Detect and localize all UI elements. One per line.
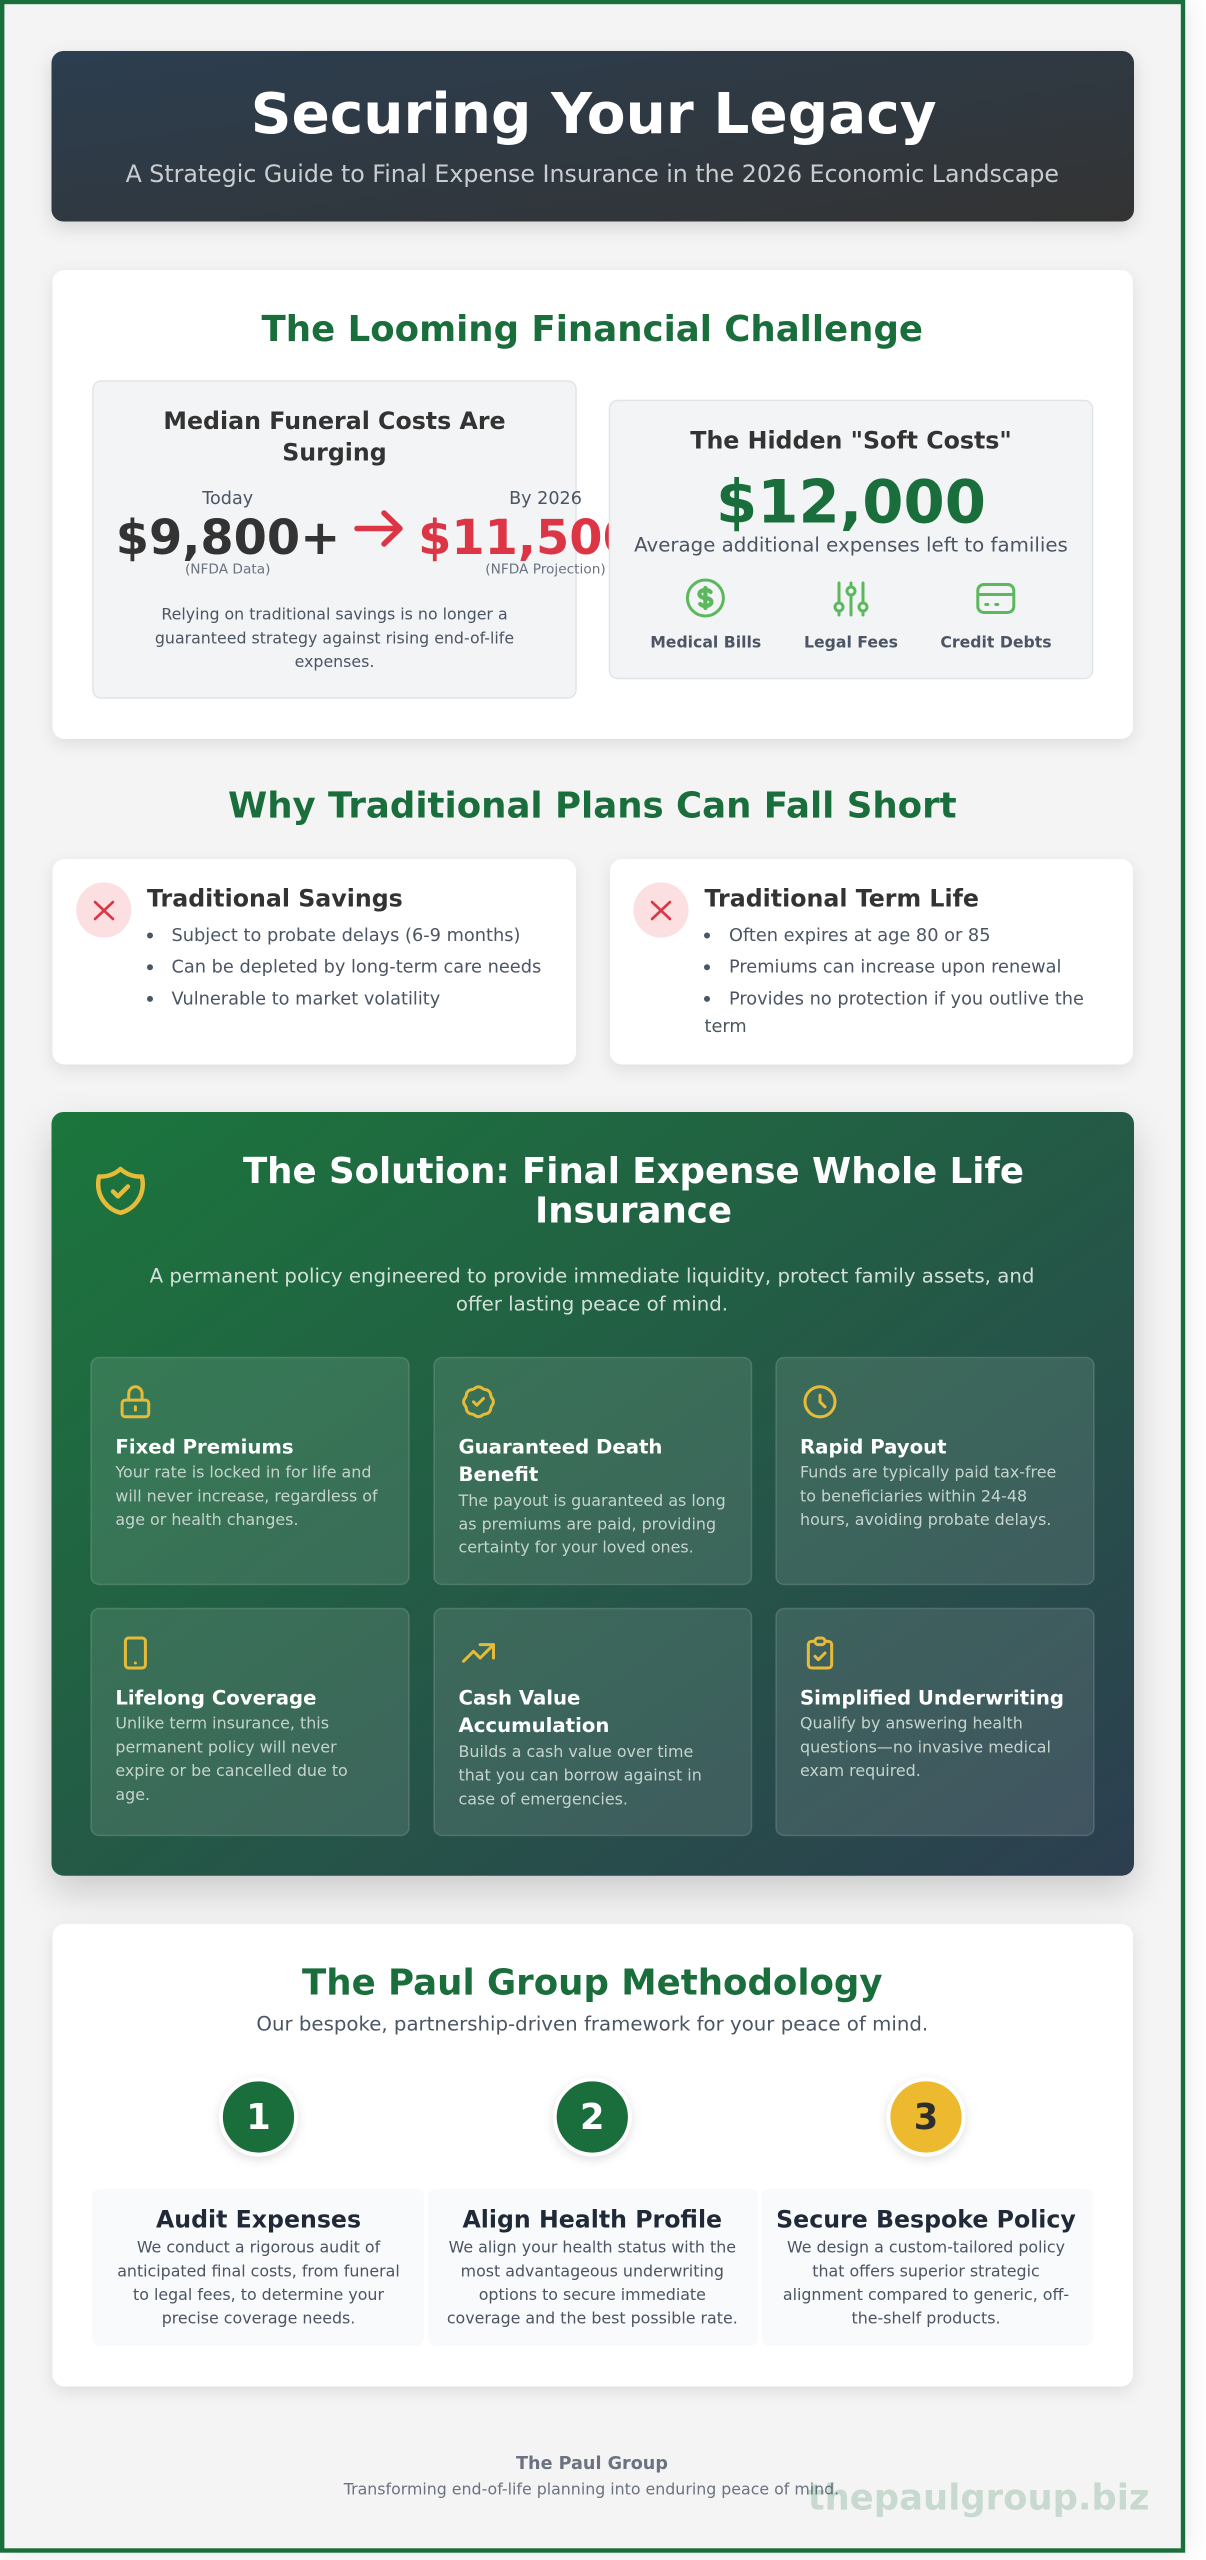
section heading: The Paul Group Methodology [302,1963,883,2004]
watermark: thepaulgroup.biz [808,2477,1149,2518]
card: guaranteed death benefit: certainty for your loved ones. [458,1538,694,1556]
icon: medical bills [687,580,723,616]
section subtitle: Our bespoke, partnership-driven framework for your peace of mind. [256,2012,928,2036]
icon: badge check [464,1387,493,1417]
subtitle: A Strategic Guide to Final Expense Insurance in the 2026 Economic Landscape [126,160,1059,188]
solution heading: Insurance [535,1191,732,1232]
card: rapid payout: to beneficiaries within 24-48 [800,1486,1027,1505]
panel note: Relying on traditional savings is no longer a [161,604,508,624]
step 2: options to secure immediate [479,2285,706,2304]
icon: red x [633,882,689,938]
today cost: Today [201,489,253,509]
bullet list: term [704,1017,747,1037]
bullet list: Premiums can increase upon renewal [729,958,1061,978]
step 3: 3 [914,2097,938,2138]
card: guaranteed death benefit [434,1358,752,1584]
section heading: The Looming Financial Challenge [262,309,923,350]
card: simplified underwriting [776,1608,1094,1836]
step 3: We design a custom-tailored policy [787,2238,1065,2257]
card: simplified underwriting: exam required. [800,1761,921,1780]
panel: methodology [52,1924,1133,2386]
step 3: Secure Bespoke Policy [776,2205,1076,2233]
section heading: why traditional plans: Why Traditional Plans Can Fall Short [228,785,957,826]
card: lifelong coverage: Lifelong Coverage [115,1687,316,1710]
card: fixed premiums: will never increase, regardless of [115,1486,378,1505]
panel: looming financial challenge [52,270,1133,739]
card: guaranteed death benefit: Benefit [458,1463,538,1486]
step 3: alignment compared to generic, off- [783,2285,1069,2304]
bullet list: Often expires at age 80 or 85 [729,926,991,946]
2026 cost: By 2026 [509,489,582,509]
card: cash value accumulation [434,1608,752,1836]
card: fixed premiums [91,1358,409,1584]
stat caption: Average additional expenses left to families [634,534,1068,557]
step 1: We conduct a rigorous audit of [137,2238,381,2257]
title: Securing Your Legacy [251,82,937,147]
cost labels: Credit Debts [940,632,1052,651]
card: guaranteed death benefit: as premiums are paid, providing [458,1515,716,1534]
bullet list: Subject to probate delays (6-9 months) [172,926,520,946]
footer: The Paul Group [516,2454,668,2474]
icon: shield [98,1169,143,1213]
today cost [116,489,340,578]
step 2: 2 [580,2097,605,2138]
arrow [357,513,400,544]
card: cash value accumulation: case of emergencies. [458,1789,628,1808]
icon: credit debts [978,584,1014,612]
card: lifelong coverage: age. [115,1785,150,1804]
card: simplified underwriting: questions—no invasive medical [800,1737,1051,1756]
big stat: $12,000 [716,468,986,536]
icon: trending up [464,1645,494,1661]
card: cash value accumulation: that you can borrow against in [458,1766,702,1785]
step 1: Audit Expenses [156,2205,361,2233]
card: lifelong coverage: permanent policy will never [115,1737,337,1756]
icon: clipboard check [808,1638,832,1668]
card: cash value accumulation: Accumulation [458,1714,609,1737]
cost labels: Legal Fees [804,632,898,651]
icon: clock [805,1387,835,1417]
icon: mobile device [125,1638,145,1668]
icon: red x [76,882,131,938]
card: rapid payout: Funds are typically paid tax-free [800,1462,1056,1482]
step 1: 1 [246,2097,271,2138]
panel heading: Median Funeral Costs Are [163,407,506,435]
solution heading: The Solution: Final Expense Whole Life [243,1151,1024,1192]
card: simplified underwriting: Simplified Underwriting [800,1687,1064,1710]
bullet list [147,926,541,1009]
panel heading: The Hidden "Soft Costs" [690,426,1012,454]
panel: traditional savings [52,859,576,1064]
panel: hidden soft costs [610,400,1092,678]
2026 cost: $11,500+ [418,511,676,566]
card: fixed premiums: Your rate is locked in for life and [114,1462,371,1482]
card: lifelong coverage: expire or be cancelled due to [115,1761,348,1780]
2026 cost [418,489,676,578]
2026 cost: (NFDA Projection) [485,562,606,578]
bullet list: Can be depleted by long-term care needs [172,958,541,978]
footer: Transforming end-of-life planning into enduring peace of mind. [343,2479,839,2498]
card: cash value accumulation: Cash Value [458,1687,580,1710]
card: lifelong coverage [91,1608,409,1836]
panel note: guaranteed strategy against rising end-of-life [155,628,514,648]
step 2 [428,2079,758,2346]
step 1: precise coverage needs. [162,2308,355,2327]
step 3 [762,2079,1093,2346]
card: guaranteed death benefit: The payout is guaranteed as long [458,1491,726,1510]
card: lifelong coverage: Unlike term insurance, this [115,1714,329,1733]
card: guaranteed death benefit: Guaranteed Death [458,1436,662,1459]
bullet list [704,926,1084,1037]
panel heading: Surging [282,438,387,466]
icon: lock [122,1387,149,1417]
today cost: (NFDA Data) [185,562,270,578]
panel: median funeral costs [93,381,676,698]
card: fixed premiums: Fixed Premiums [115,1436,294,1459]
solution intro: A permanent policy engineered to provide immediate liquidity, protect family assets, and [150,1265,1034,1288]
icon: legal fees [835,583,867,615]
panel note: expenses. [295,652,374,671]
footer [343,2454,839,2498]
step 2: coverage and the best possible rate. [447,2308,738,2327]
bullet list: Provides no protection if you outlive the [729,989,1084,1009]
panel: the solution [52,1112,1134,1876]
step 1: anticipated final costs, from funeral [117,2261,400,2280]
step 1: to legal fees, to determine your [133,2285,384,2304]
card: rapid payout [776,1358,1094,1584]
card: fixed premiums: age or health changes. [115,1510,299,1529]
card: rapid payout: hours, avoiding probate delays. [800,1510,1051,1529]
today cost: $9,800+ [116,511,340,566]
cost labels: Medical Bills [650,632,761,651]
step 1 [92,2079,424,2346]
card heading: Traditional Savings [147,884,403,912]
step 2: We align your health status with the [449,2238,736,2257]
bullet list: Vulnerable to market volatility [172,989,440,1009]
card: simplified underwriting: Qualify by answering health [800,1714,1023,1733]
step 3: that offers superior strategic [812,2261,1040,2280]
card: rapid payout: Rapid Payout [800,1436,947,1459]
step 3: the-shelf products. [851,2308,1001,2327]
solution intro: offer lasting peace of mind. [456,1292,728,1315]
card: cash value accumulation: Builds a cash value over time [458,1742,693,1761]
step 2: Align Health Profile [462,2205,722,2233]
step 2: most advantageous underwriting [461,2261,724,2280]
panel: traditional term life [610,859,1133,1064]
header banner [52,51,1134,222]
card heading: Traditional Term Life [704,884,979,912]
cost labels [650,632,1052,651]
